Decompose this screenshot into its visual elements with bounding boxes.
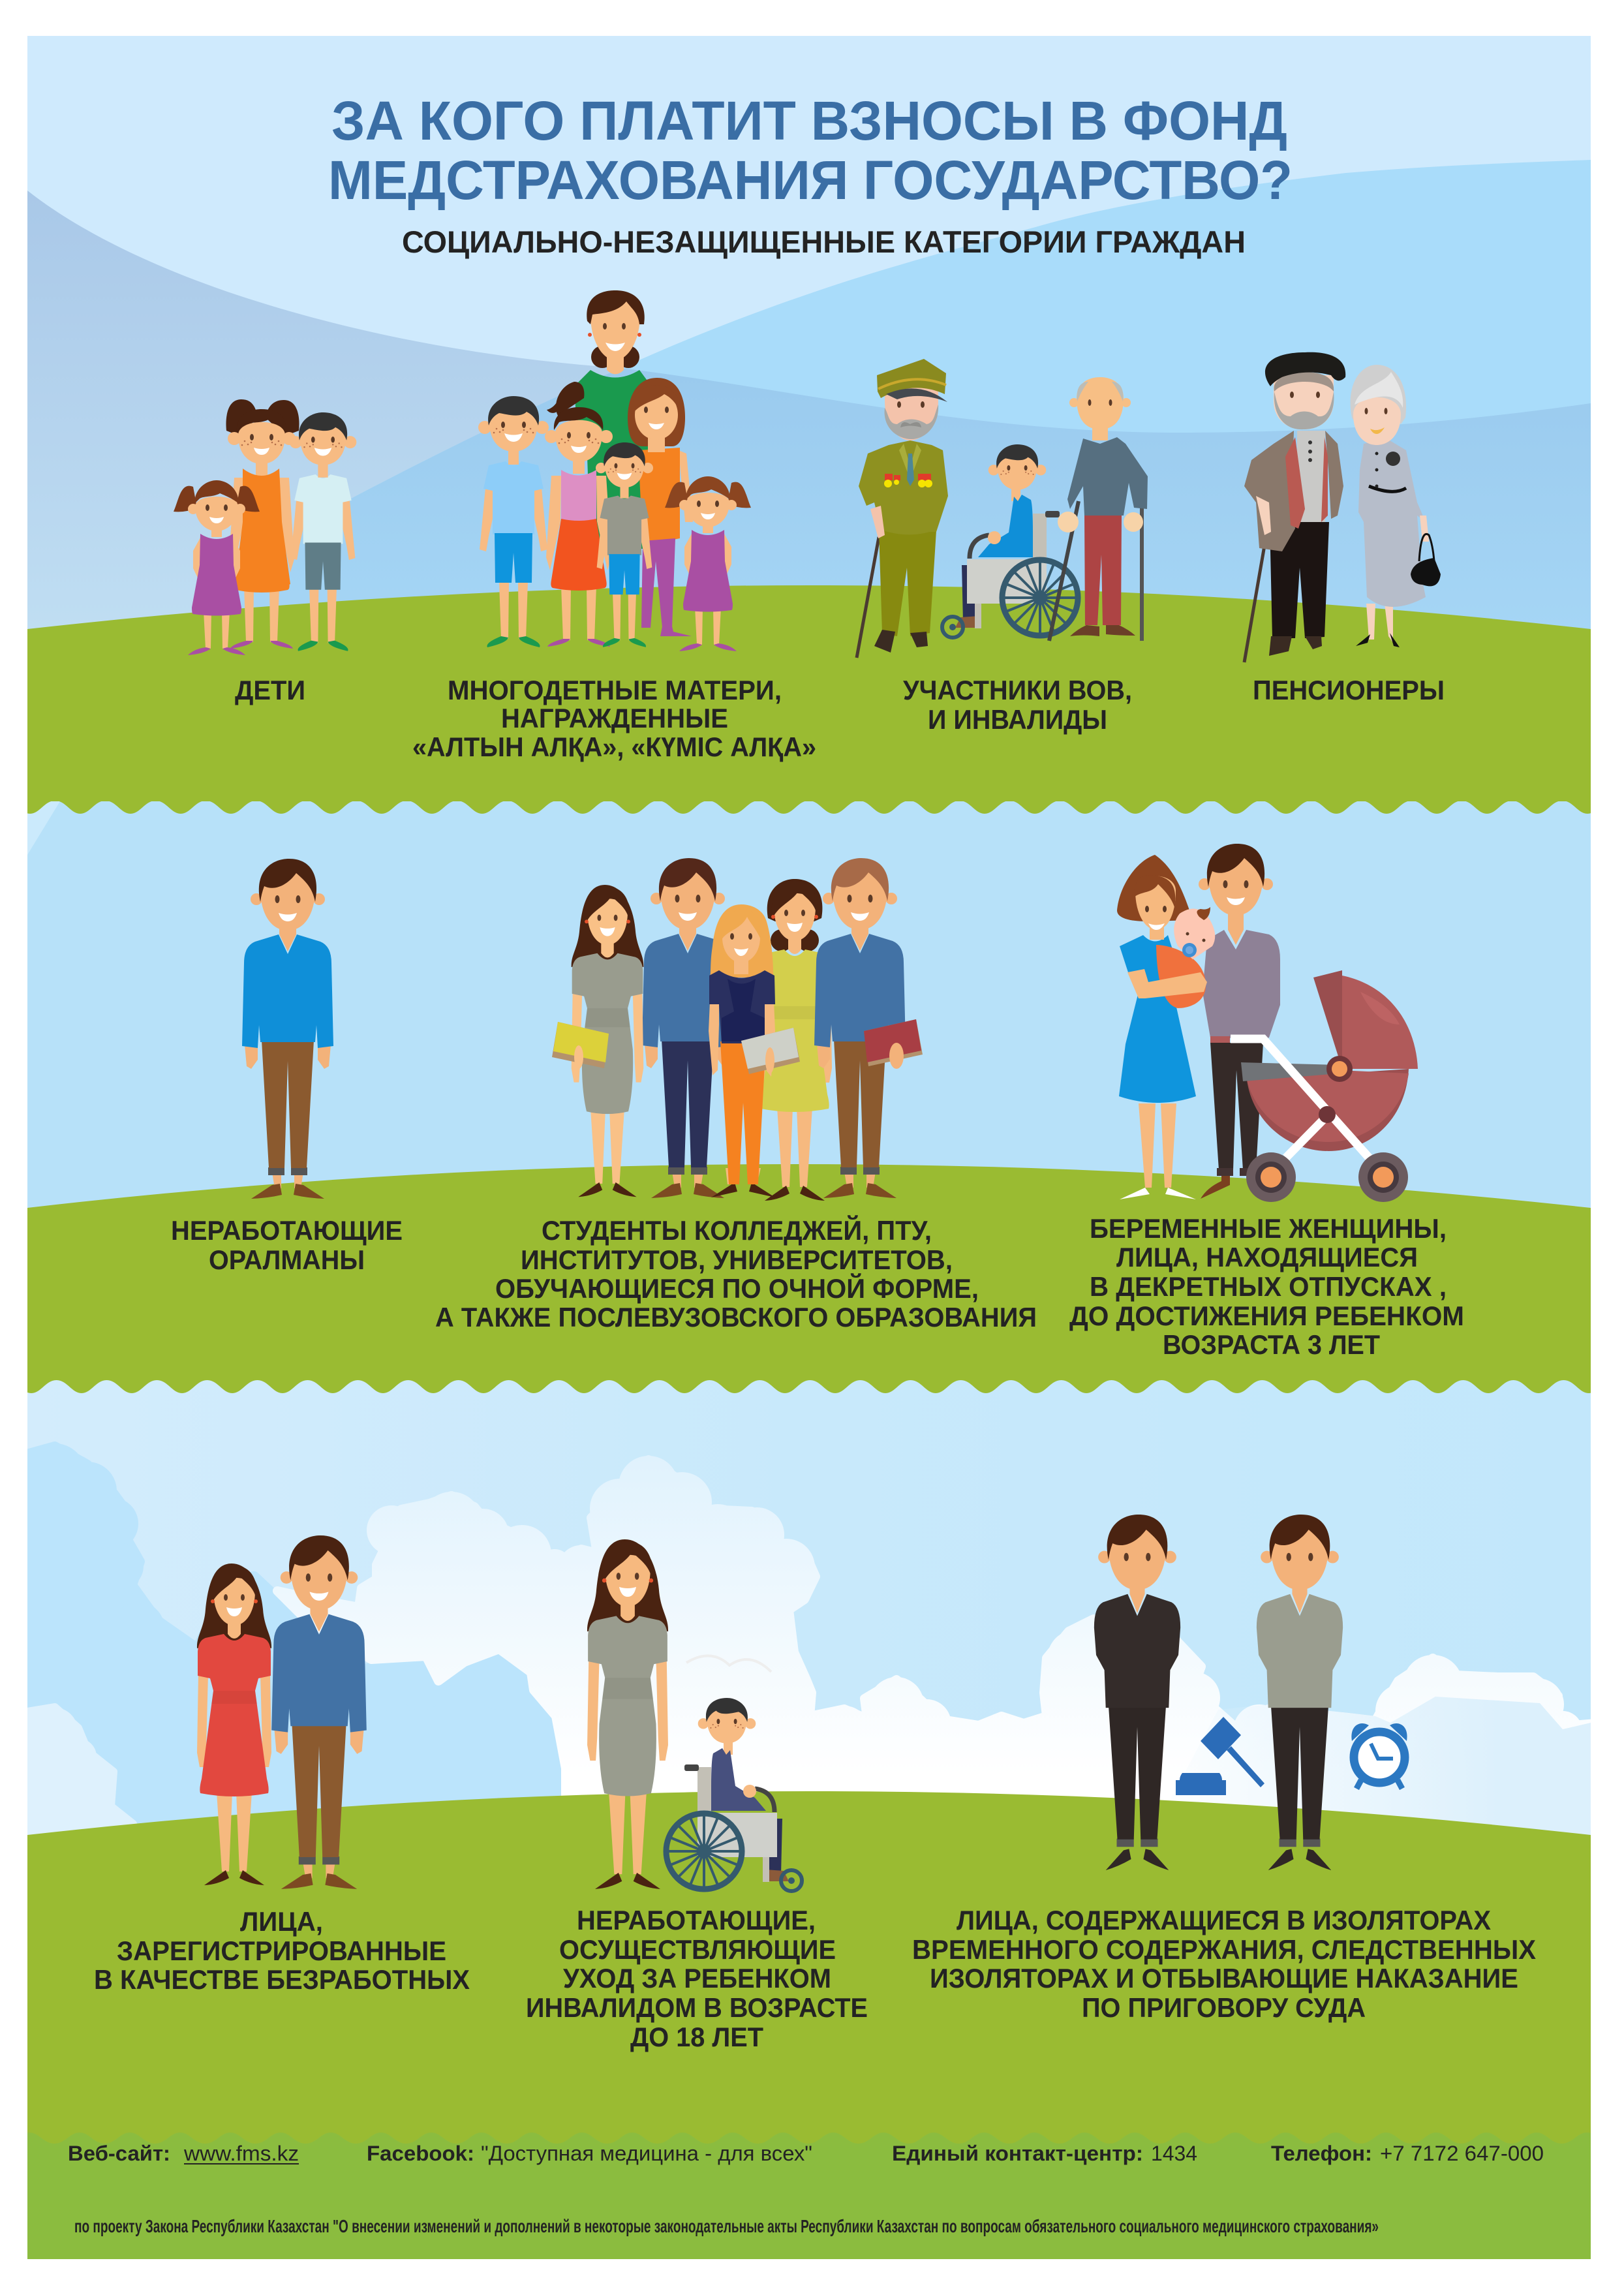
labels: section 2: В ДЕКРЕТНЫХ ОТПУСКАХ , xyxy=(1090,1271,1447,1302)
panel: section 3 green hill xyxy=(27,1791,1591,2147)
labels: section 2 xyxy=(171,1213,1464,1360)
figure group: veteran, wheelchair boy and man with crutches xyxy=(857,359,1148,658)
footer contacts: Телефон: xyxy=(1271,2142,1372,2165)
figure group: unemployed couple xyxy=(197,1535,367,1889)
mother in green xyxy=(575,290,651,549)
labels: section 3: ПО ПРИГОВОРУ СУДА xyxy=(1082,1992,1366,2023)
footer contacts xyxy=(68,2142,1544,2165)
man in grey sweater xyxy=(1257,1515,1343,1870)
labels: section 3: ДО 18 ЛЕТ xyxy=(630,2022,763,2052)
little girl in purple xyxy=(174,480,260,655)
title: МЕДСТРАХОВАНИЯ ГОСУДАРСТВО? xyxy=(328,149,1293,211)
labels: section 1: И ИНВАЛИДЫ xyxy=(928,704,1107,735)
old man with crutches xyxy=(1049,377,1148,641)
labels: section 2: ВОЗРАСТА 3 ЛЕТ xyxy=(1163,1329,1380,1360)
labels: section 3: ЛИЦА, xyxy=(240,1906,323,1937)
blonde woman xyxy=(709,904,775,1197)
boy in wheelchair xyxy=(942,444,1078,638)
subtitle: СОЦИАЛЬНО-НЕЗАЩИЩЕННЫЕ КАТЕГОРИИ ГРАЖДАН xyxy=(402,224,1246,259)
boy in pale shirt xyxy=(290,412,356,651)
boy in light blue shirt xyxy=(478,396,549,647)
figure group: young family with stroller xyxy=(1117,844,1418,1202)
decorative bird xyxy=(686,1656,771,1672)
labels: section 3: ИНВАЛИДОМ В ВОЗРАСТЕ xyxy=(526,1992,868,2023)
clouds: right-side cloud tint xyxy=(1224,1697,1591,1835)
man in blue sweater and brown trousers xyxy=(814,858,906,1198)
labels: section 3: ЗАРЕГИСТРИРОВАННЫЕ xyxy=(117,1935,446,1966)
figure group: carer and child in wheelchair xyxy=(587,1539,802,1891)
labels: section 1: ДЕТИ xyxy=(235,675,305,705)
scalloped divider 2 xyxy=(27,1380,1591,1393)
labels: section 1 xyxy=(235,675,1445,762)
footer contacts: Единый контакт-центр: xyxy=(892,2142,1143,2165)
labels: section 1: МНОГОДЕТНЫЕ МАТЕРИ, xyxy=(448,675,782,705)
figure: unemployed repatriate man xyxy=(242,859,333,1199)
labels: section 2: ОРАЛМАНЫ xyxy=(209,1244,365,1275)
stroller xyxy=(1231,970,1418,1202)
labels: section 3: ВРЕМЕННОГО СОДЕРЖАНИЯ, СЛЕДСТВЕННЫХ xyxy=(912,1934,1536,1965)
title: ЗА КОГО ПЛАТИТ ВЗНОСЫ В ФОНД xyxy=(331,90,1287,151)
labels: section 1: ПЕНСИОНЕРЫ xyxy=(1253,675,1445,705)
labels: section 3 xyxy=(94,1905,1536,2052)
labels: section 3: ЛИЦА, СОДЕРЖАЩИЕСЯ В ИЗОЛЯТОРАХ xyxy=(957,1905,1491,1935)
panel: section 1 green hill xyxy=(27,585,1591,802)
woman in grey dress xyxy=(587,1539,668,1889)
icon: gavel xyxy=(1176,1717,1264,1795)
footer contacts: Веб-сайт: xyxy=(68,2142,170,2165)
labels: section 3: УХОД ЗА РЕБЕНКОМ xyxy=(563,1963,831,1994)
little girl in purple dress xyxy=(665,476,751,651)
labels: section 3: НЕРАБОТАЮЩИЕ, xyxy=(577,1905,816,1935)
clouds: small pale cloud at bottom left xyxy=(27,1703,137,1835)
panel: footer band xyxy=(27,2133,1591,2259)
figure group: detained persons xyxy=(1094,1515,1407,1870)
man in black sweater xyxy=(1094,1515,1180,1870)
figure group: mother with many children xyxy=(478,290,751,651)
labels: section 2: ОБУЧАЮЩИЕСЯ ПО ОЧНОЙ ФОРМЕ, xyxy=(495,1272,979,1304)
old man with cane xyxy=(1244,352,1345,662)
older girl in orange xyxy=(226,399,299,649)
labels: section 3: ИЗОЛЯТОРАХ И ОТБЫВАЮЩИЕ НАКАЗАНИЕ xyxy=(930,1963,1518,1994)
footer contacts: "Доступная медицина - для всех" xyxy=(481,2142,812,2165)
teen daughter in orange xyxy=(628,378,693,636)
woman in grey dress xyxy=(572,885,643,1197)
labels: section 2: А ТАКЖЕ ПОСЛЕВУЗОВСКОГО ОБРАЗОВАНИЯ xyxy=(435,1302,1037,1332)
figure group: pensioners xyxy=(1244,352,1441,662)
labels: section 2: СТУДЕНТЫ КОЛЛЕДЖЕЙ, ПТУ, xyxy=(542,1214,932,1246)
footer contacts: +7 7172 647-000 xyxy=(1380,2142,1544,2165)
labels: section 2: ЛИЦА, НАХОДЯЩИЕСЯ xyxy=(1116,1242,1418,1272)
labels: section 3: ОСУЩЕСТВЛЯЮЩИЕ xyxy=(559,1934,836,1965)
veteran xyxy=(857,359,948,658)
title xyxy=(328,90,1293,211)
labels: section 2: ДО ДОСТИЖЕНИЯ РЕБЕНКОМ xyxy=(1069,1301,1464,1331)
books xyxy=(552,1019,923,1074)
footer contacts: Facebook: xyxy=(367,2142,474,2165)
labels: section 2: НЕРАБОТАЮЩИЕ xyxy=(171,1215,403,1246)
figure group: children xyxy=(174,399,356,655)
scalloped divider 1 xyxy=(27,801,1591,814)
clouds: white foreground clouds xyxy=(277,1456,1595,1853)
panel: section 3 sky background xyxy=(27,1380,1591,1725)
figure group: students xyxy=(552,858,923,1201)
footer contacts: 1434 xyxy=(1151,2142,1197,2165)
woman in red dress xyxy=(197,1563,271,1885)
icon: alarm clock xyxy=(1351,1723,1407,1789)
labels: section 1: УЧАСТНИКИ ВОВ, xyxy=(903,675,1132,705)
boy in wheelchair xyxy=(666,1698,802,1891)
labels: section 2: БЕРЕМЕННЫЕ ЖЕНЩИНЫ, xyxy=(1090,1213,1447,1244)
footer contacts: www.fms.kz xyxy=(183,2142,299,2165)
small boy in grey shirt xyxy=(596,442,653,647)
labels: section 1: НАГРАЖДЕННЫЕ xyxy=(501,703,728,733)
mother with baby xyxy=(1117,855,1215,1199)
labels: section 3: В КАЧЕСТВЕ БЕЗРАБОТНЫХ xyxy=(94,1964,470,1995)
man in blue sweater xyxy=(271,1535,367,1889)
panel: section 1 sky background xyxy=(27,36,1591,629)
old woman xyxy=(1351,365,1441,647)
baby head xyxy=(1174,907,1215,959)
labels: section 1: «АЛТЫН АЛҚА», «КҮМІС АЛҚА» xyxy=(412,732,816,762)
panel: section 2 sky background xyxy=(27,801,1591,1208)
man in blue sweater and navy trousers xyxy=(642,858,733,1198)
woman in yellow dress xyxy=(758,879,832,1201)
clouds: blue background clouds xyxy=(20,1443,568,1853)
panel: section 2 green hill xyxy=(27,1164,1591,1381)
labels: section 2: ИНСТИТУТОВ, УНИВЕРСИТЕТОВ, xyxy=(521,1244,953,1275)
girl with red skirt xyxy=(545,382,613,647)
father xyxy=(1199,844,1280,1199)
